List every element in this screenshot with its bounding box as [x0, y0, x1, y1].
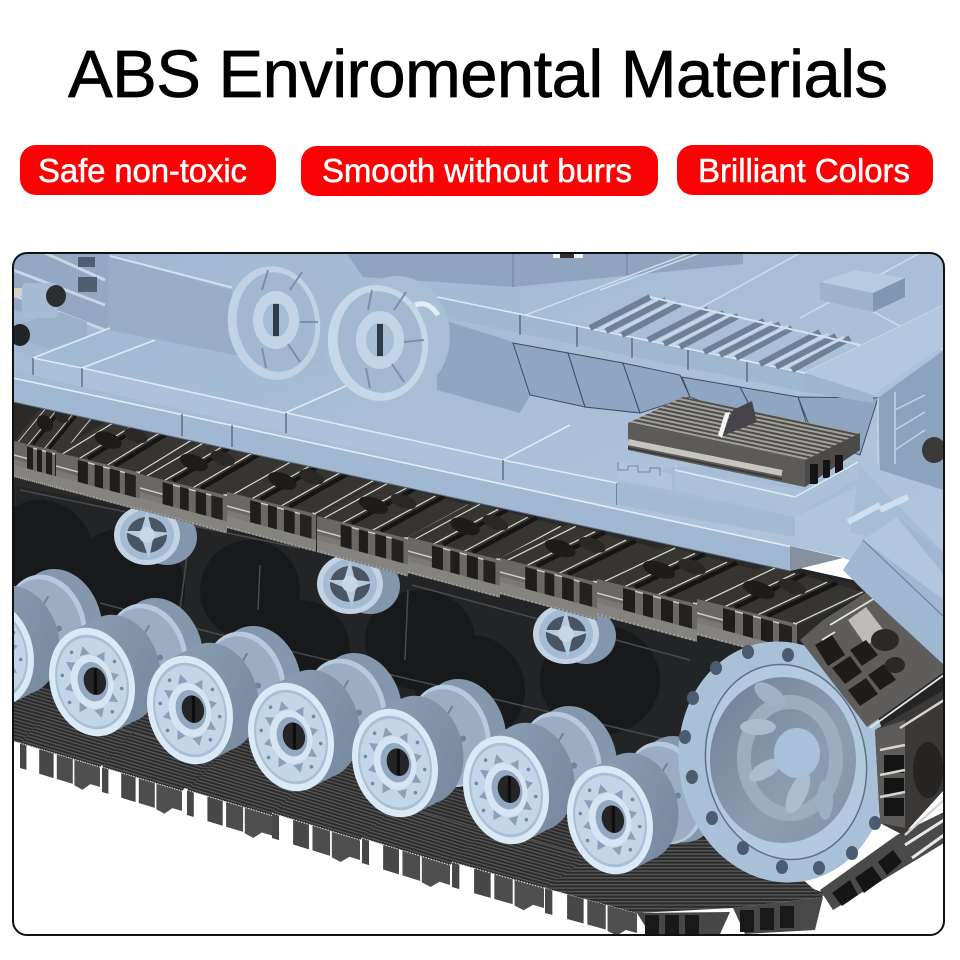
spare road wheel left — [228, 266, 320, 380]
upper track links — [14, 408, 866, 648]
road wheels — [14, 569, 704, 874]
right track wrap — [800, 590, 944, 835]
badge: brilliant colors: Brilliant Colors — [698, 152, 910, 189]
badge: safe non-toxic: Safe non-toxic — [38, 152, 247, 189]
spare road wheel right — [328, 276, 450, 401]
right deck plate seams — [523, 253, 944, 373]
front strip — [13, 378, 843, 571]
dark hull side — [14, 485, 943, 839]
upper wall behind wheels — [232, 286, 234, 345]
hinge — [848, 497, 908, 522]
deck base — [14, 254, 943, 560]
vent base plate — [618, 462, 858, 498]
front glacis plate — [843, 517, 944, 665]
badge: smooth without burrs: Smooth without burrs — [322, 152, 632, 189]
square block on deck — [820, 270, 905, 312]
panel: tank close-up photo — [0, 253, 946, 951]
right corner plate — [806, 306, 943, 373]
return rollers — [114, 505, 616, 664]
upper hull deck — [14, 254, 943, 572]
panel border — [13, 253, 944, 935]
title: ABS Enviromental Materials — [68, 37, 888, 112]
badge: brilliant colors — [677, 145, 933, 195]
deck plates and front edge — [13, 328, 944, 571]
louvre vents — [590, 297, 850, 370]
lower track run — [13, 680, 944, 951]
engine vent block — [628, 397, 860, 487]
badge: smooth without burrs — [301, 146, 658, 196]
drive sprocket — [678, 642, 882, 882]
sprocket bolt holes — [679, 645, 881, 875]
turret base — [347, 254, 743, 287]
left mantlet block — [10, 253, 108, 348]
rear wall plate — [108, 256, 240, 356]
angled side panels — [513, 343, 878, 455]
louvre strip front — [522, 316, 805, 392]
badge: safe non-toxic — [20, 145, 276, 195]
